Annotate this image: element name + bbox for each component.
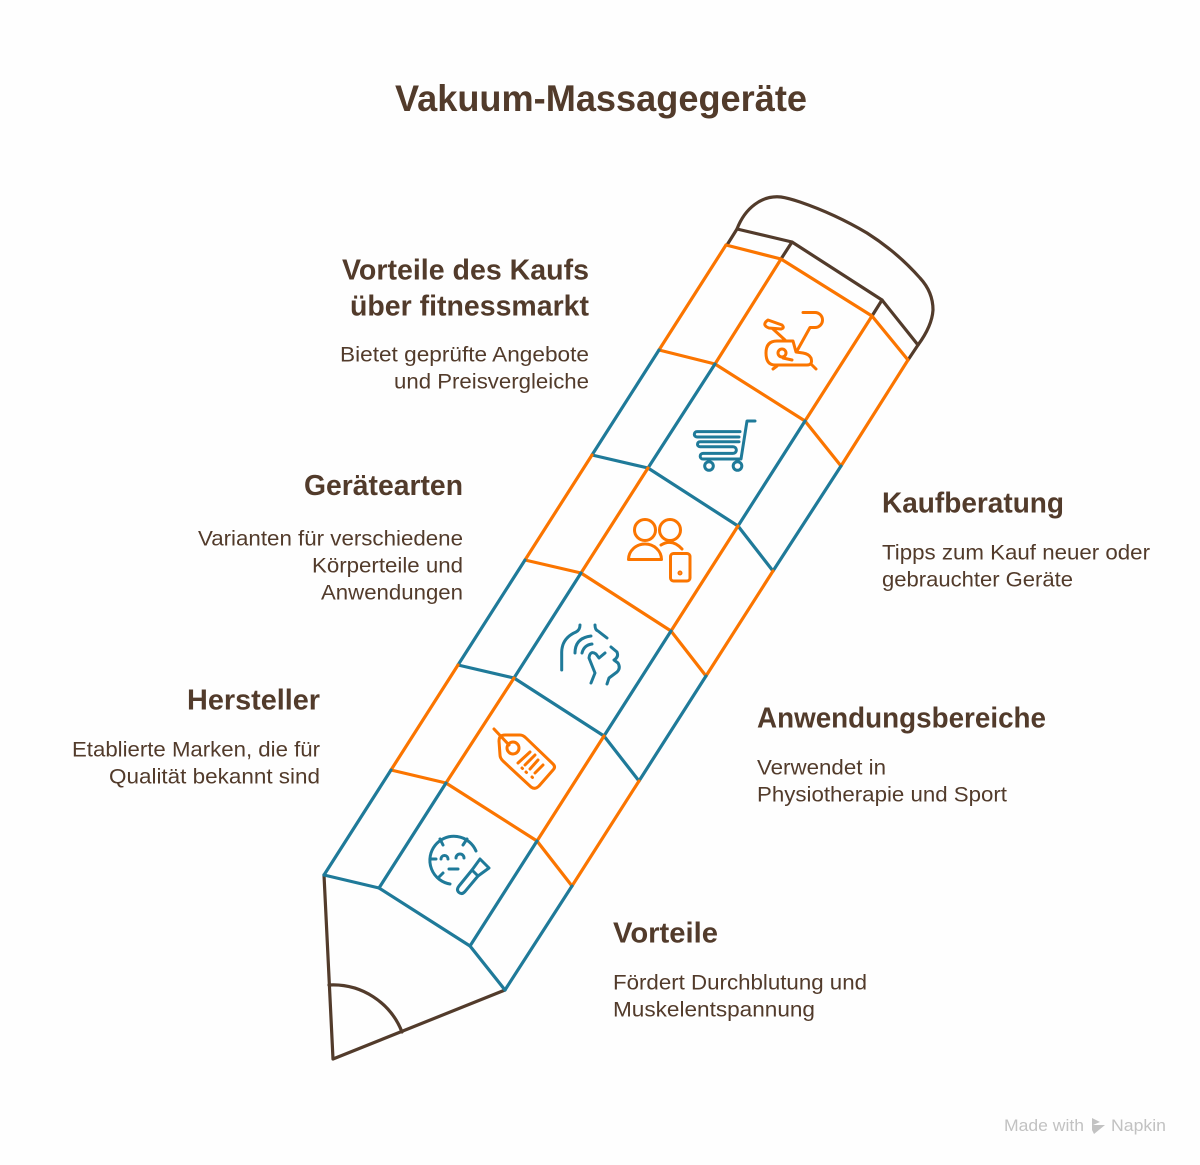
icon: shopping cart — [694, 421, 755, 470]
label: Gerätearten: Varianten für verschiedene — [198, 526, 463, 550]
label: Hersteller: Qualität bekannt sind — [109, 764, 320, 788]
label: Gerätearten — [198, 470, 463, 604]
label: Vorteile des Kaufs: über fitnessmarkt — [350, 290, 589, 322]
label: Vorteile: Muskelentspannung — [613, 998, 815, 1022]
label: Hersteller: Hersteller — [187, 684, 320, 716]
segment 4: teal — [458, 560, 706, 781]
segment 6: teal — [324, 770, 572, 990]
label: Vorteile: Vorteile — [613, 918, 718, 950]
segment 2: teal — [592, 350, 841, 571]
title: Vakuum-Massagegeräte — [395, 78, 807, 119]
footer: Made with Napkin — [1004, 1117, 1166, 1135]
label: Vorteile des Kaufs — [340, 254, 589, 394]
label: Kaufberatung — [882, 488, 1150, 592]
icon: face with brush — [430, 836, 489, 894]
footer: Made with Napkin: Napkin — [1111, 1117, 1166, 1135]
pencil diagram — [324, 197, 933, 1059]
segment 1: orange — [659, 245, 908, 466]
label: Kaufberatung: Tipps zum Kauf neuer oder — [882, 540, 1150, 564]
label: Gerätearten: Gerätearten — [304, 470, 463, 502]
icon: price tag — [494, 729, 554, 788]
label: Anwendungsbereiche: Anwendungsbereiche — [757, 702, 1046, 734]
segment 3: orange — [525, 455, 773, 676]
label: Anwendungsbereiche: Physiotherapie und Sport — [757, 782, 1007, 806]
label: Kaufberatung: gebrauchter Geräte — [882, 568, 1073, 592]
pencil eraser — [727, 197, 933, 360]
label: Vorteile — [613, 918, 867, 1022]
icon: Napkin logo — [1092, 1118, 1105, 1134]
label: Vorteile: Fördert Durchblutung und — [613, 970, 867, 994]
icon: hand gesture — [562, 625, 619, 684]
label: Anwendungsbereiche — [757, 702, 1046, 806]
label: Vorteile des Kaufs: Vorteile des Kaufs — [342, 254, 589, 286]
label: Vorteile des Kaufs: und Preisvergleiche — [394, 370, 589, 394]
label: Gerätearten: Körperteile und — [312, 554, 463, 578]
icon: people with phone — [628, 520, 690, 581]
label: Kaufberatung: Kaufberatung — [882, 488, 1064, 520]
label: Vorteile des Kaufs: Bietet geprüfte Angebote — [340, 342, 589, 366]
footer: Made with Napkin: Made with — [1004, 1117, 1084, 1135]
segment 5: orange — [391, 665, 639, 886]
label: Gerätearten: Anwendungen — [321, 580, 463, 604]
label: Anwendungsbereiche: Verwendet in — [757, 756, 886, 780]
label: Hersteller — [72, 684, 320, 788]
icon: exercise bike — [765, 312, 823, 369]
label: Hersteller: Etablierte Marken, die für — [72, 738, 320, 762]
pencil tip — [324, 875, 505, 1059]
